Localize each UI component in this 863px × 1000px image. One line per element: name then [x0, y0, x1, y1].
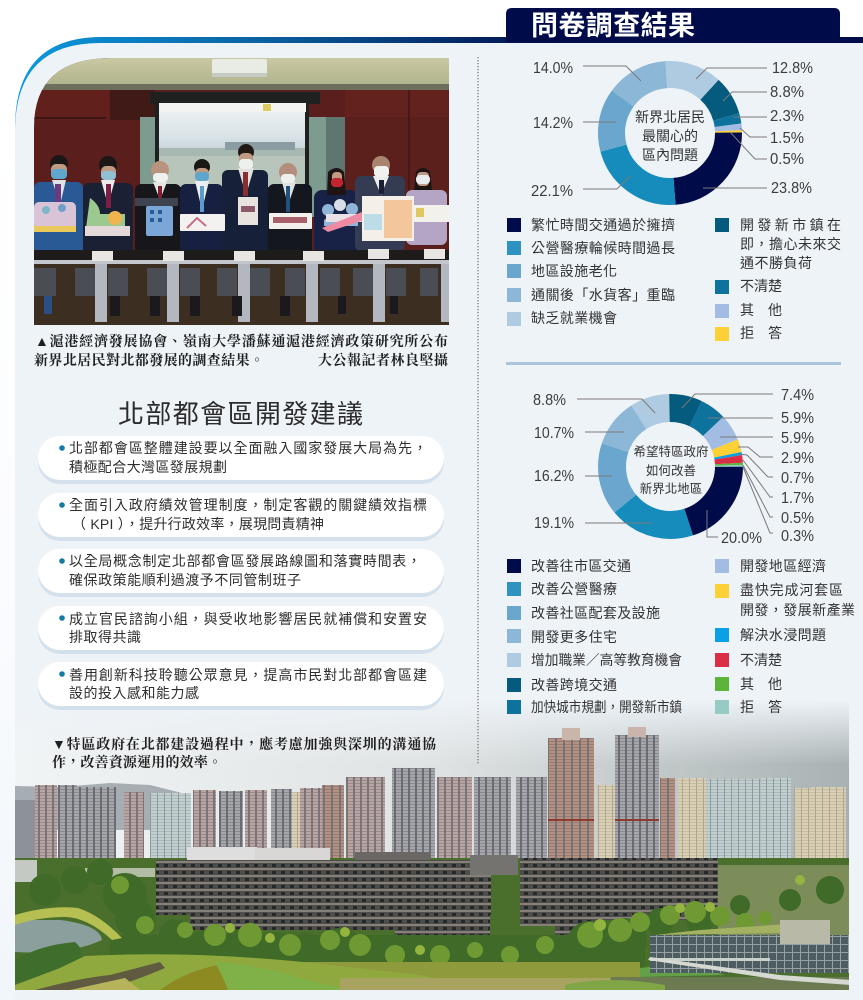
suggestion 4: 排取得共識 [69, 629, 141, 645]
legend: residents' top concerns: 通關後「水貨客」重臨 [531, 287, 675, 303]
chart: how government should improve the New Territories North donut: 10.7% [534, 425, 574, 442]
legend: how government should improve: 他 [768, 676, 782, 692]
chart: residents' top concerns donut: 0.5% [770, 151, 804, 168]
suggestion 3 [38, 549, 444, 597]
suggestion 3: 確保政策能順利過渡予不同管制班子 [69, 572, 301, 588]
legend: how government should improve: 改善跨境交通 [531, 677, 617, 693]
suggestion 2: （ KPI ），提升行政效率，展現問責精神 [72, 516, 324, 532]
legend: residents' top concerns: 缺乏就業機會 [531, 310, 617, 326]
legend: residents' top concerns [507, 217, 841, 341]
chart: how government should improve the New Territories North donut: 5.9% [781, 410, 814, 427]
chart: residents' top concerns donut: 2.3% [770, 108, 804, 125]
photo caption: 大公報記者林良堅攝 [318, 352, 448, 369]
lower photo caption: 作，改善資源運用的效率。 [52, 754, 222, 771]
chart: how government should improve the New Territories North donut: 16.2% [534, 468, 574, 485]
legend: how government should improve: 加快城市規劃，開發新市鎮 [531, 699, 682, 715]
chart: how government should improve the New Territories North donut: 8.8% [533, 392, 566, 409]
held boards [34, 196, 449, 241]
photo: press conference [34, 58, 449, 325]
legend: how government should improve: 盡快完成河套區 [740, 582, 843, 598]
suggestion 5 [38, 662, 444, 710]
left margin strip [0, 120, 15, 1000]
legend: how government should improve: 開發，發展新產業 [740, 602, 855, 618]
suggestion 1: 北部都會區整體建設要以全面融入國家發展大局為先， [69, 440, 427, 456]
legend: how government should improve [507, 558, 855, 715]
photo caption: 新界北居民對北都發展的調查結果。 [34, 352, 264, 369]
dotted column divider [477, 57, 479, 765]
chart: residents' top concerns donut: 8.8% [770, 84, 804, 101]
header tab: survey results [506, 8, 840, 42]
glass building [650, 935, 849, 973]
suggestion 2: 全面引入政府績效管理制度，制定客觀的關鍵績效指標 [69, 497, 427, 513]
legend: how government should improve: 開發地區經濟 [740, 558, 826, 574]
suggestion 3: 以全局概念制定北部都會區發展路線圖和落實時間表， [69, 553, 421, 569]
legend: residents' top concerns: 答 [768, 325, 782, 341]
legend: how government should improve: 開發更多住宅 [531, 629, 617, 645]
suggestion 5: 善用創新科技聆聽公眾意見，提高市民對北部都會區建 [69, 667, 427, 683]
pond and wetland [15, 920, 102, 952]
suggestion 1 [38, 436, 444, 484]
chart: residents' top concerns donut: 區內問題 [642, 147, 698, 163]
header tab: survey results: 問卷調查結果 [531, 11, 695, 41]
chart: how government should improve the New Territories North donut: 如何改善 [646, 463, 696, 478]
legend: residents' top concerns: 繁忙時間交通過於擁擠 [531, 217, 675, 233]
chart: residents' top concerns donut: 最關心的 [642, 128, 698, 144]
legend: residents' top concerns: 他 [768, 302, 782, 318]
photo caption [34, 333, 448, 369]
chart: how government should improve the New Territories North donut: 0.7% [781, 470, 814, 487]
suggestion 2 [38, 493, 444, 541]
legend: how government should improve: 改善公營醫療 [531, 581, 617, 597]
legend: residents' top concerns: 公營醫療輪候時間過長 [531, 240, 675, 256]
trees [29, 859, 844, 968]
chart: how government should improve the New Territories North donut: 2.9% [781, 450, 814, 467]
chart: how government should improve the New Territories North donut: 7.4% [781, 387, 814, 404]
suggestion 4: 成立官民諮詢小組，與受收地影響居民就補償和安置安 [69, 611, 427, 627]
legend: residents' top concerns: 即，擔心未來交 [740, 236, 841, 252]
suggestion 1: 積極配合大灣區發展規劃 [69, 459, 227, 475]
chart: how government should improve the New Territories North donut: 5.9% [781, 430, 814, 447]
lower photo caption [52, 736, 436, 771]
suggestion 5: 設的投入感和能力感 [69, 685, 199, 701]
chart: how government should improve the New Territories North donut: 0.5% [781, 510, 814, 527]
ground and greenery [15, 858, 849, 990]
chart: how government should improve the New Territories North donut: 0.3% [781, 528, 814, 545]
chart: residents' top concerns donut: 12.8% [772, 60, 813, 77]
legend: how government should improve: 解決水浸問題 [740, 627, 826, 643]
legend: residents' top concerns: 通不勝負荷 [740, 255, 812, 271]
legend: residents' top concerns: 地區設施老化 [531, 263, 617, 279]
legend: residents' top concerns: 開發新市鎮在 [740, 217, 841, 233]
photo: northern new town skyline [15, 700, 850, 990]
conference table, chairs and floor [34, 249, 449, 325]
chart: residents' top concerns donut: 1.5% [770, 130, 804, 147]
legend: residents' top concerns: 拒 [740, 325, 754, 341]
panel: northern metropolis suggestions [38, 399, 444, 710]
chart: residents' top concerns donut: 14.0% [533, 60, 573, 77]
chart: residents' top concerns donut: 新界北居民 [635, 109, 705, 125]
chart: residents' top concerns donut [531, 60, 813, 200]
legend: residents' top concerns: 不清楚 [740, 278, 782, 294]
legend: how government should improve: 改善社區配套及設施 [531, 605, 660, 621]
legend: how government should improve: 不清楚 [740, 652, 782, 668]
people [34, 144, 447, 255]
dark midrise complex [156, 860, 491, 915]
chart: how government should improve the New Territories North donut: 1.7% [781, 490, 814, 507]
legend: how government should improve: 其 [740, 676, 754, 692]
chart: residents' top concerns donut: 14.2% [533, 115, 573, 132]
legend: how government should improve: 增加職業／高等教育機會 [531, 652, 682, 668]
chart: residents' top concerns donut: 22.1% [531, 183, 573, 200]
divider between charts [506, 362, 841, 365]
legend: residents' top concerns: 其 [740, 302, 754, 318]
blue header arc and rule [15, 37, 863, 128]
chart: how government should improve the New Territories North donut: 希望特區政府 [633, 444, 709, 459]
lower photo caption: ▼特區政府在北都建設過程中，應考慮加強與深圳的溝通協 [52, 736, 436, 753]
heading: 北部都會區開發建議 [118, 399, 363, 429]
photo caption: ▲滬港經濟發展協會、嶺南大學潘蘇通滬港經濟政策研究所公布 [35, 333, 448, 350]
chart: how government should improve the New Territories North donut: 20.0% [721, 530, 762, 547]
chart: residents' top concerns donut: 23.8% [771, 180, 812, 197]
suggestion 4 [38, 606, 444, 654]
chart: how government should improve the New Territories North donut: 新界北地區 [640, 481, 702, 496]
legend: how government should improve: 拒 [740, 699, 754, 715]
chart: how government should improve the New Territories North donut: 19.1% [534, 515, 574, 532]
chart: how government should improve the New Territories North donut [533, 387, 814, 547]
legend: how government should improve: 答 [768, 699, 782, 715]
legend: how government should improve: 改善往市區交通 [531, 558, 631, 574]
